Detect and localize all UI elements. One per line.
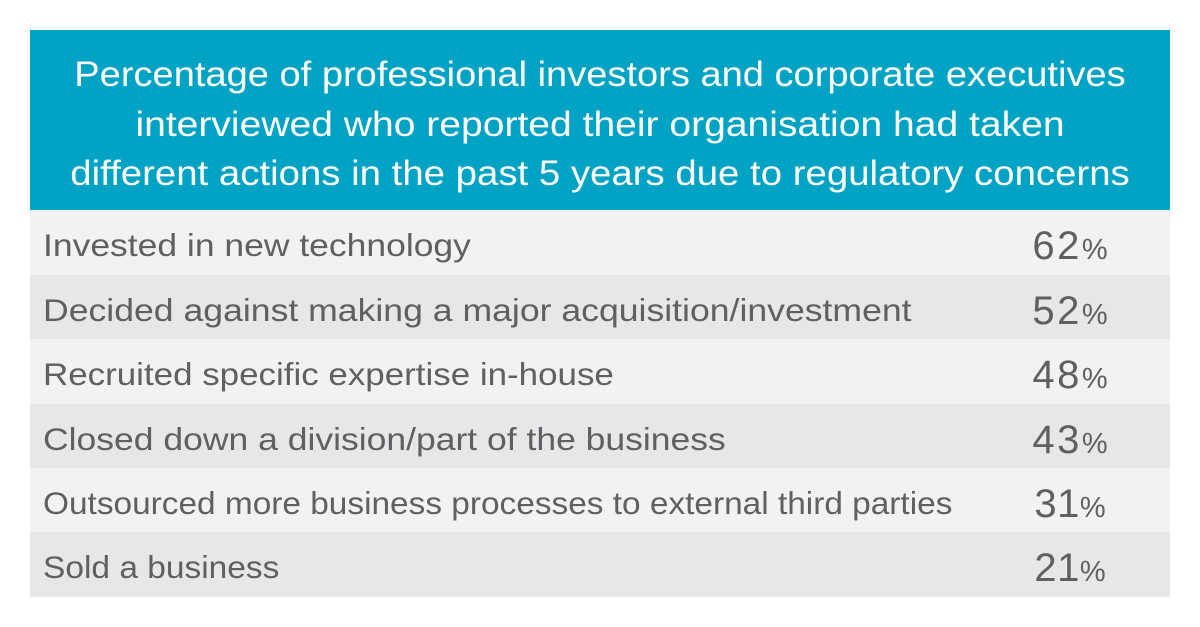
row: outsourced processes: Outsourced more business processes to external third parties bbox=[43, 485, 952, 521]
row: decided against acquisition: Decided against making a major acquisition/investment bbox=[43, 292, 912, 328]
row: decided against acquisition: 52% bbox=[1032, 289, 1108, 333]
row: decided against acquisition bbox=[30, 275, 1170, 340]
row: invested in new technology: Invested in new technology bbox=[43, 227, 471, 263]
title: Percentage of professional investors and corporate executives bbox=[74, 54, 1126, 94]
title: interviewed who reported their organisation had taken bbox=[135, 104, 1065, 144]
row: invested in new technology: 62% bbox=[1032, 224, 1108, 268]
title bbox=[30, 30, 1170, 210]
title: different actions in the past 5 years due to regulatory concerns bbox=[70, 153, 1130, 193]
row: recruited expertise: 48% bbox=[1032, 353, 1108, 397]
row: closed down a division bbox=[30, 404, 1170, 469]
row: recruited expertise bbox=[30, 339, 1170, 404]
row: closed down a division: 43% bbox=[1032, 418, 1108, 462]
row: sold a business: Sold a business bbox=[43, 549, 279, 585]
row: invested in new technology bbox=[30, 210, 1170, 275]
row: outsourced processes: 31% bbox=[1034, 482, 1106, 526]
row: closed down a division: Closed down a division/part of the business bbox=[43, 421, 726, 457]
row: sold a business: 21% bbox=[1034, 546, 1106, 590]
row: outsourced processes bbox=[30, 468, 1170, 533]
row: sold a business bbox=[30, 532, 1170, 597]
row: recruited expertise: Recruited specific expertise in-house bbox=[43, 356, 614, 392]
